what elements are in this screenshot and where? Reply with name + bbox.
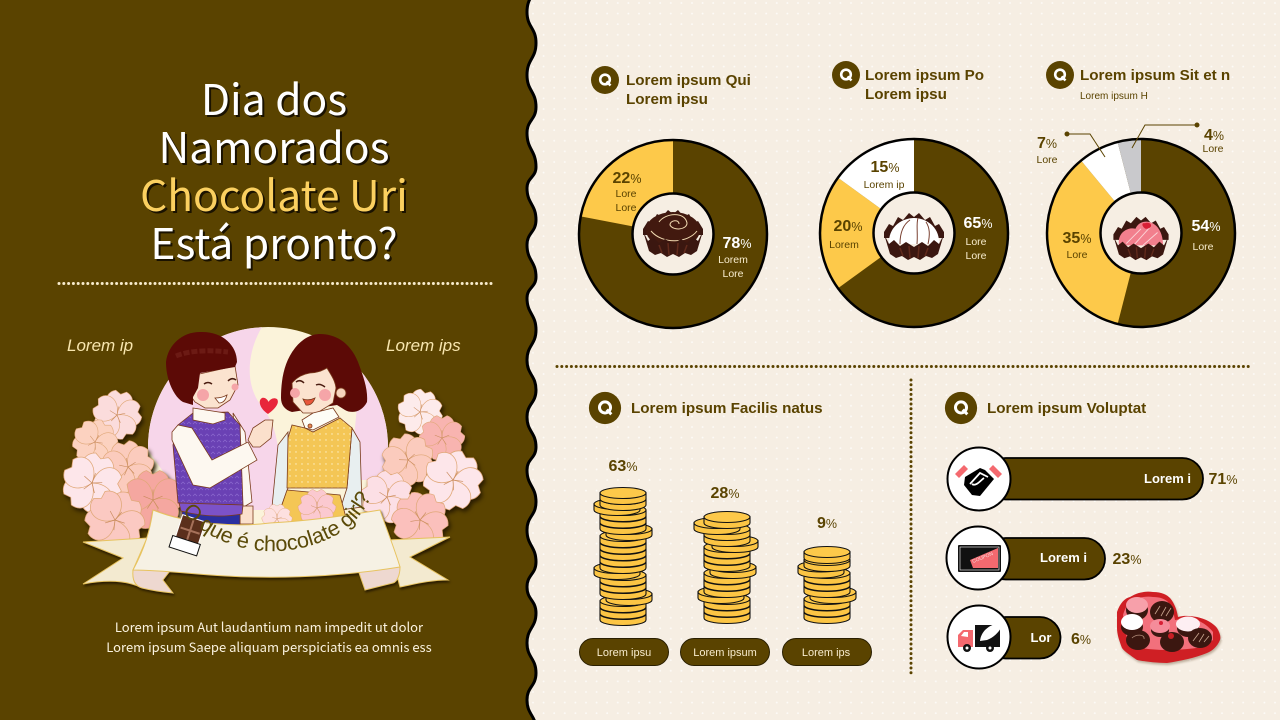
labels: pie 3: Lore: [1202, 143, 1224, 155]
icon: coupon: [958, 545, 1001, 572]
labels: pie 1: Lorem: [718, 254, 748, 266]
heading: pie 3: Lorem ipsum Sit et n: [1080, 67, 1230, 84]
bar 71%: [948, 448, 1237, 510]
caption: Lorem ipsum Aut laudantium nam impedit ut dolor: [115, 617, 424, 636]
ribbon text: O que é chocolate girl?: [185, 492, 369, 552]
title: Chocolate Uri: [140, 163, 408, 224]
stack 28%: 28%: [711, 485, 739, 502]
left panel with wavy edge: [0, 0, 536, 720]
title: Dia dos: [201, 67, 347, 128]
labels: pie 1: 78%: [723, 235, 751, 252]
icon: white chocolate: [884, 213, 944, 260]
coin stack chart: [580, 458, 872, 666]
labels: pie 3: Lore: [1192, 241, 1214, 253]
bar 6%: [948, 606, 1091, 668]
leader lines: [1065, 123, 1199, 157]
bar 23%: 23%: [1113, 551, 1141, 568]
labels: pie 2: Lorem: [829, 239, 859, 251]
bar 71%: Lorem i: [1144, 471, 1191, 486]
bar 23%: [946, 526, 1141, 590]
skirt flowers: [260, 489, 338, 536]
icon: coupon: COUPON: [972, 551, 994, 565]
heading: pie 2: [832, 61, 984, 103]
labels: pie 1: 22%: [613, 170, 641, 187]
horizontal divider: [557, 365, 1252, 368]
icon: delivery truck: [958, 623, 1003, 652]
labels: pie 1: Lore: [615, 188, 637, 200]
heading: pie 2: Lorem ipsum Po: [865, 67, 984, 84]
bar 6%: Lor: [1031, 630, 1051, 645]
bar chart: [946, 448, 1237, 668]
labels: pie 3: [1036, 127, 1224, 261]
girl: [272, 334, 367, 525]
title: [140, 67, 408, 272]
title: Está pronto?: [150, 211, 398, 272]
heading: pie 3: Lorem ipsum H: [1080, 91, 1148, 102]
flowers left: [50, 386, 186, 567]
caption: Lorem ipsum Saepe aliquam perspiciatis ea omnis ess: [106, 637, 432, 656]
labels: pie 3: 54%: [1192, 218, 1220, 235]
pill labels: Lorem ipsu: [597, 647, 651, 659]
pie chart 3: [1036, 123, 1235, 327]
heading: coin chart: Lorem ipsum Facilis natus: [631, 400, 823, 417]
pill labels: Lorem ips: [802, 647, 851, 659]
title divider: [59, 282, 493, 285]
heading: bar chart: Lorem ipsum Voluptat: [987, 400, 1146, 417]
labels: pie 1: Lore: [722, 268, 744, 280]
labels: pie 3: 7%: [1037, 135, 1057, 152]
pie chart 1: [579, 140, 767, 328]
stack 9%: [798, 515, 856, 624]
illustration: couple with flowers and ribbon: [62, 327, 487, 596]
heading: bar chart: [945, 392, 1146, 424]
pill labels: Lorem ipsum: [693, 647, 757, 659]
heading: pie 2: Lorem ipsu: [865, 86, 947, 103]
labels: pie 2: 15%: [871, 159, 899, 176]
labels: pie 2: Lorem ip: [864, 179, 905, 191]
bar 71%: 71%: [1209, 471, 1237, 488]
heart: [260, 398, 278, 414]
icon: chocolate bar: [169, 514, 207, 556]
labels: pie 2: [829, 159, 992, 262]
flowers right: [354, 384, 496, 563]
boy: [166, 332, 273, 530]
pill labels: [580, 638, 872, 666]
dotted background pattern: [530, 0, 1280, 720]
label left: Lorem ip: [67, 336, 133, 355]
labels: pie 3: 35%: [1063, 230, 1091, 247]
labels: pie 3: Lore: [1036, 154, 1058, 166]
labels: pie 3: Lore: [1066, 249, 1088, 261]
ribbon text path: [180, 495, 372, 551]
heading: pie 1: Lorem ipsu: [626, 91, 708, 108]
icon: swirl chocolate: [643, 210, 703, 257]
ribbon banner: [83, 510, 450, 593]
bar 23%: Lorem i: [1040, 550, 1087, 565]
labels: pie 3: 4%: [1204, 127, 1224, 144]
heading: coin chart: [589, 392, 823, 424]
bar 6%: 6%: [1071, 631, 1091, 648]
chocolates: [1121, 597, 1212, 652]
labels: pie 1: [613, 170, 751, 280]
heading: pie 3: [1046, 61, 1230, 102]
labels: pie 2: 20%: [834, 218, 862, 235]
stack 28%: [694, 485, 758, 624]
heading: pie 1: [591, 66, 751, 108]
stack 63%: [594, 458, 652, 626]
icon: pink chocolate: [1113, 217, 1169, 260]
label right: Lorem ips: [386, 336, 461, 355]
background circle: [148, 327, 388, 524]
labels: pie 2: Lore: [965, 250, 987, 262]
labels: pie 2: Lore: [965, 236, 987, 248]
labels: pie 1: Lore: [615, 202, 637, 214]
vertical divider: [910, 380, 912, 674]
icon: heart chocolate box: [1117, 592, 1220, 663]
heading: pie 1: Lorem ipsum Qui: [626, 72, 751, 89]
icon: handshake: [955, 465, 1002, 496]
caption: [106, 617, 432, 656]
stack 63%: 63%: [609, 458, 637, 475]
stack 9%: 9%: [817, 515, 837, 532]
pie chart 2: [820, 139, 1008, 327]
title: Namorados: [158, 115, 390, 176]
labels: pie 2: 65%: [964, 215, 992, 232]
